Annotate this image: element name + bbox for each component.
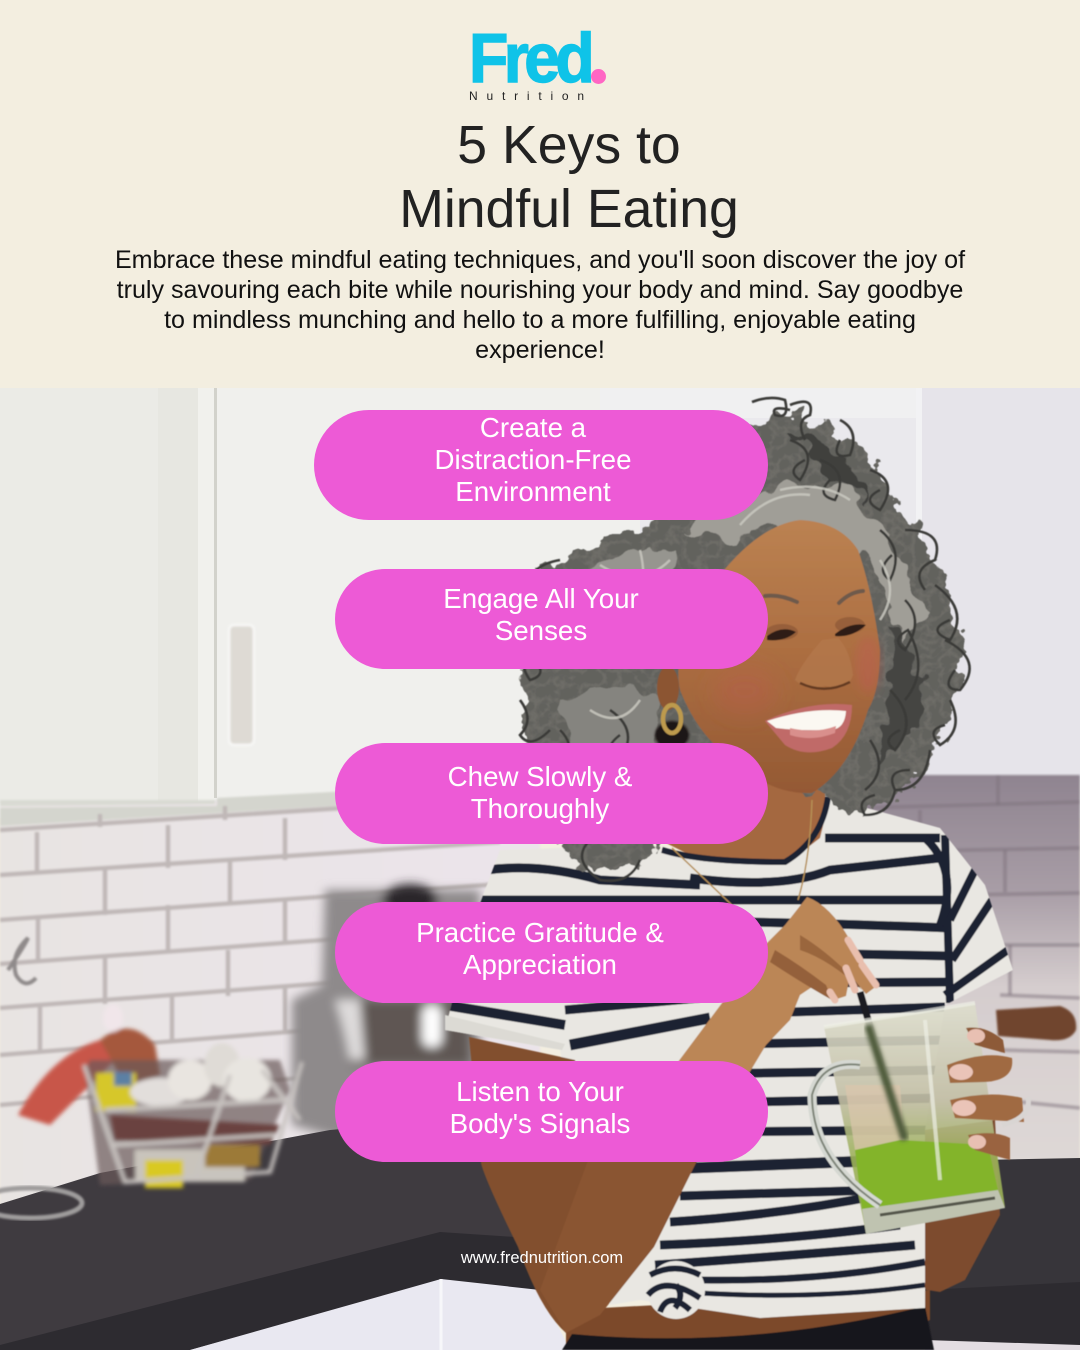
step pill 5: Body's Signals [450,1108,630,1139]
lower cabinet [190,1279,570,1350]
right tile wall [860,775,1080,1170]
title: 5 Keys to [457,115,681,175]
chrome ring [0,1188,82,1218]
nails [967,1029,985,1043]
kitchen background [0,388,1080,1350]
title: Mindful Eating [399,179,739,239]
tile scribble [8,938,36,983]
nose [795,638,853,688]
fingers holding mug [947,1028,1028,1160]
intro text: experience! [475,336,605,364]
striped shirt [445,797,1013,1318]
upper cabinets [0,388,1080,818]
step pill 4: Practice Gratitude & [416,917,664,948]
photo: smiling woman with green smoothie in a kitchen [0,388,1080,1350]
hair curls [520,398,970,881]
intro text [115,246,966,364]
logo wordmark: Fred [469,19,590,97]
countertop [0,1110,1080,1350]
fingernails [830,940,876,1000]
left tile wall [0,782,540,1240]
smoothie [855,1140,998,1209]
near arm [469,1037,700,1333]
eyebrows [765,591,863,603]
step pill 2: Senses [495,615,587,646]
intro text: Embrace these mindful eating techniques, and you'll soon discover the joy of [115,246,965,274]
knot of shirt [647,1261,705,1319]
straw in glass [868,1025,905,1140]
logo: Fred Nutrition [469,19,606,103]
neck [660,740,825,866]
mug handle [812,1064,880,1205]
step pill 4: Appreciation [463,949,617,980]
glass mug of green smoothie [812,1003,1005,1234]
cheeks [713,666,777,714]
mug highlights [824,1003,975,1180]
hair [520,398,970,881]
step pill 1: Environment [455,476,611,507]
title [399,115,739,239]
logo pink dot [591,69,606,84]
step pill 1: Create a [480,412,586,443]
wooden board on wall [996,1006,1076,1040]
step pill 4 [335,902,768,1003]
basket of food [18,1004,302,1188]
logo subtitle: Nutrition [469,89,593,103]
face [678,520,880,793]
intro text: to mindless munching and hello to a more fulfilling, enjoyable eating [164,306,916,334]
cabinet handle [229,625,254,745]
stirring straw [860,992,902,1136]
step pill 1 [314,410,768,520]
step pill 5: Listen to Your [456,1076,624,1107]
step pill 3: Chew Slowly & [448,761,632,792]
dark hair behind earring [655,721,689,749]
step pill 5 [335,1061,768,1162]
smile [765,704,852,752]
step pill 3 [335,743,768,844]
mug upper glass [824,1003,1005,1233]
hair undercoat [522,412,965,876]
shirt collar [662,797,828,862]
website url: www.frednutrition.com [461,1249,623,1267]
ear [657,666,679,710]
earring [663,705,681,733]
far arm behind glass [915,1120,1000,1292]
step pill 2: Engage All Your [443,583,639,614]
midriff [566,1290,930,1350]
woman [445,398,1028,1350]
necklace [672,800,812,908]
forearm and stirring hand [640,897,878,1155]
header panel [0,0,1080,388]
intro text: truly savouring each bite while nourishing your body and mind. Say goodbye [117,276,963,304]
trousers [562,1306,934,1350]
kettle [292,884,480,1145]
mug base [862,1190,1005,1234]
eyes [766,617,866,640]
ring [1002,1097,1028,1125]
step pill 1: Distraction-Free [435,444,631,475]
step pill 2 [335,569,768,669]
step pill 3: Thoroughly [471,793,609,824]
